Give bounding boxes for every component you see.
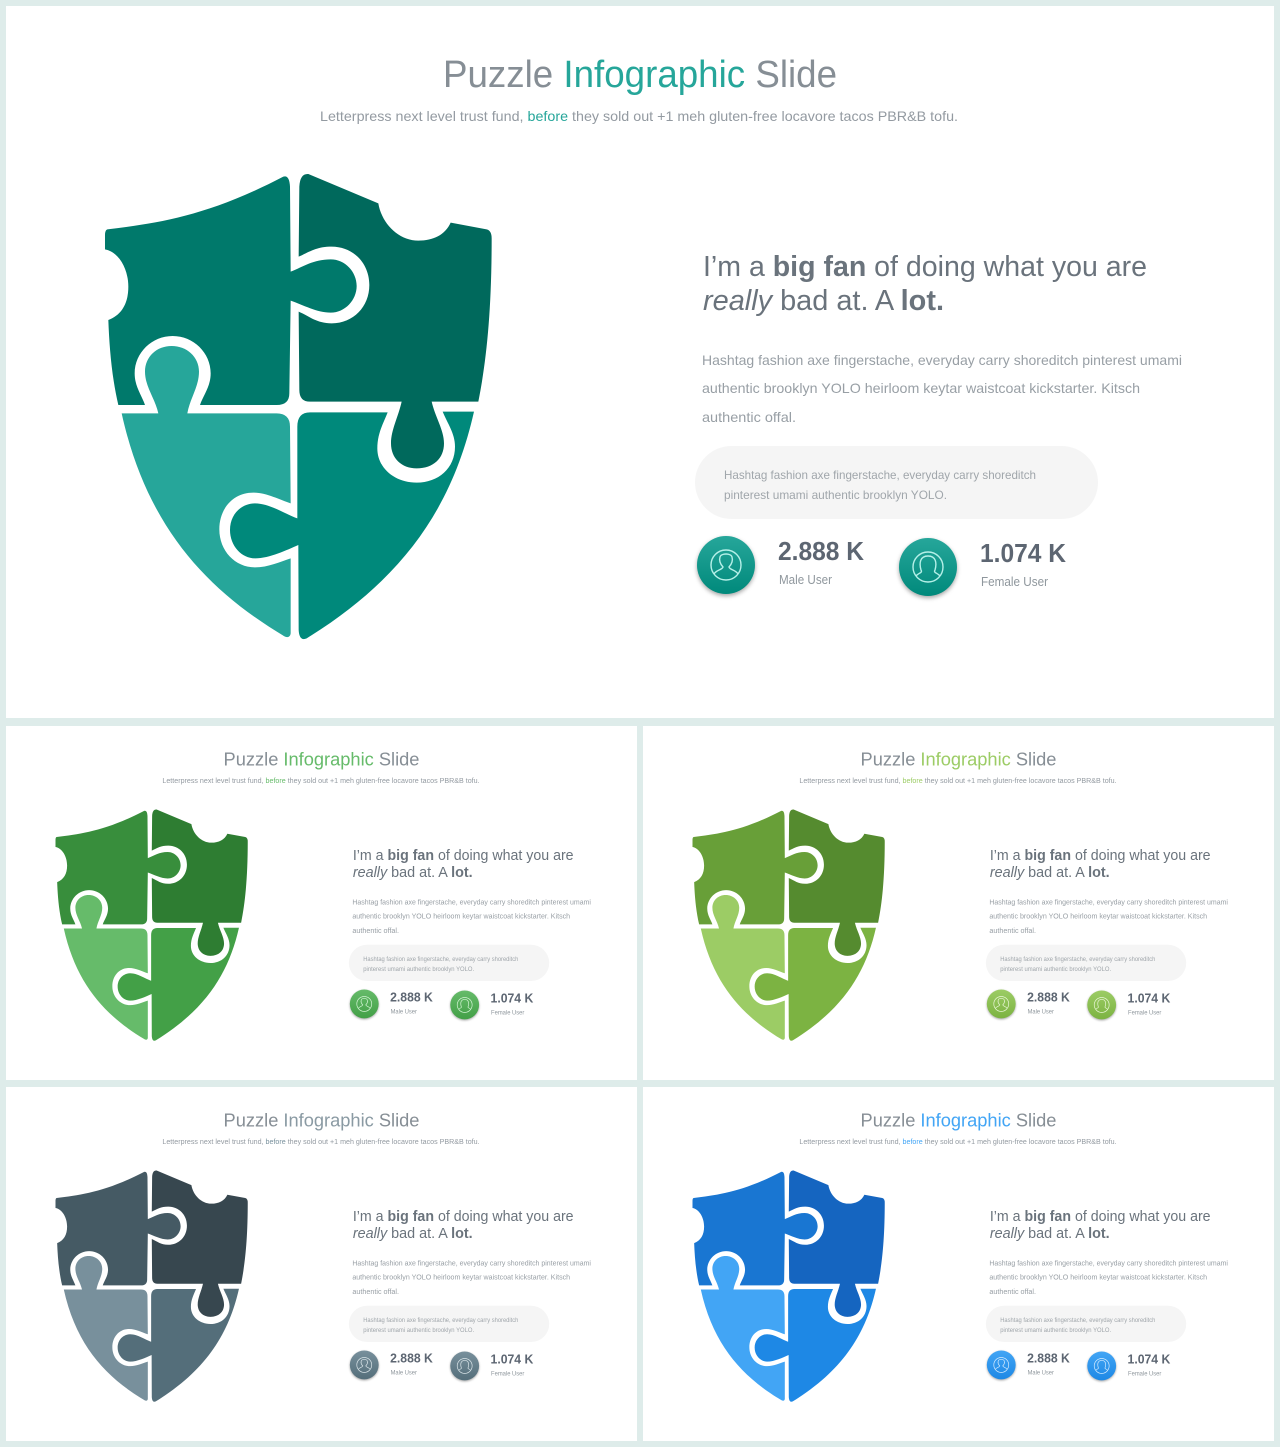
heading: I’m a big fan of doing what you are <box>990 848 1211 864</box>
panel: slate grey slide <box>6 1087 637 1441</box>
body text <box>989 1260 1228 1296</box>
stat: male user <box>350 989 433 1018</box>
subtitle: Letterpress next level trust fund, before they sold out +1 meh gluten-free locavore tacos PBR&B tofu. <box>162 1139 480 1146</box>
stat: female user: Female User <box>981 575 1048 589</box>
body text: authentic offal. <box>702 409 796 425</box>
callout pill <box>349 1306 549 1342</box>
stat: male user: 2.888 K <box>390 1350 433 1365</box>
body text: Hashtag fashion axe fingerstache, everyday carry shoreditch pinterest umami <box>702 352 1182 368</box>
callout pill: Hashtag fashion axe fingerstache, everyday carry shoreditch <box>1000 1318 1155 1324</box>
stat: male user <box>697 536 864 594</box>
callout pill: pinterest umami authentic brooklyn YOLO. <box>1000 1328 1111 1334</box>
puzzle shield <box>56 1171 248 1402</box>
body text <box>989 899 1228 935</box>
callout pill <box>349 945 549 981</box>
stat: female user <box>899 538 1066 596</box>
puzzle shield <box>56 810 248 1041</box>
stat: male user: Male User <box>391 1008 417 1015</box>
stat: female user: 1.074 K <box>1128 990 1171 1005</box>
body text <box>352 1260 591 1296</box>
heading <box>353 848 574 881</box>
heading: really bad at. A lot. <box>353 1226 473 1242</box>
subtitle: Letterpress next level trust fund, before they sold out +1 meh gluten-free locavore tacos PBR&B tofu. <box>799 778 1117 785</box>
heading: really bad at. A lot. <box>990 865 1110 881</box>
panel: green slide <box>6 726 637 1080</box>
heading: I’m a big fan of doing what you are <box>353 848 574 864</box>
stat: male user: 2.888 K <box>390 989 433 1004</box>
body text: authentic offal. <box>989 928 1036 935</box>
subtitle: Letterpress next level trust fund, before they sold out +1 meh gluten-free locavore tacos PBR&B tofu. <box>162 778 480 785</box>
body text: authentic brooklyn YOLO heirloom keytar waistcoat kickstarter. Kitsch <box>352 1274 570 1281</box>
stat: male user: Male User <box>1028 1008 1054 1015</box>
stat: female user: 1.074 K <box>491 1351 534 1366</box>
body text: Hashtag fashion axe fingerstache, everyday carry shoreditch pinterest umami <box>352 1260 591 1267</box>
stat: female user: Female User <box>1128 1009 1161 1016</box>
callout pill: pinterest umami authentic brooklyn YOLO. <box>363 1328 474 1334</box>
body text: authentic brooklyn YOLO heirloom keytar waistcoat kickstarter. Kitsch <box>352 913 570 920</box>
title: Puzzle Infographic Slide <box>443 54 837 96</box>
stat: female user: Female User <box>1128 1370 1161 1377</box>
body text: authentic brooklyn YOLO heirloom keytar waistcoat kickstarter. Kitsch <box>989 913 1207 920</box>
body text: authentic offal. <box>352 928 399 935</box>
heading: really bad at. A lot. <box>703 285 944 317</box>
callout pill: Hashtag fashion axe fingerstache, everyday carry shoreditch <box>1000 957 1155 963</box>
stat: male user: 2.888 K <box>778 536 864 566</box>
heading <box>353 1209 574 1242</box>
callout pill: Hashtag fashion axe fingerstache, everyday carry shoreditch <box>724 468 1036 482</box>
stat: male user <box>987 989 1070 1018</box>
stat: female user: Female User <box>491 1370 524 1377</box>
body text: authentic brooklyn YOLO heirloom keytar waistcoat kickstarter. Kitsch <box>702 380 1140 396</box>
stat: female user <box>450 990 534 1019</box>
body text: Hashtag fashion axe fingerstache, everyday carry shoreditch pinterest umami <box>352 899 591 906</box>
body text: Hashtag fashion axe fingerstache, everyday carry shoreditch pinterest umami <box>989 899 1228 906</box>
title: Puzzle Infographic Slide <box>224 749 419 770</box>
body text <box>352 899 591 935</box>
body text: Hashtag fashion axe fingerstache, everyday carry shoreditch pinterest umami <box>989 1260 1228 1267</box>
stat: female user <box>1087 1351 1171 1380</box>
panel: light green slide <box>643 726 1274 1080</box>
subtitle: Letterpress next level trust fund, before they sold out +1 meh gluten-free locavore tacos PBR&B tofu. <box>799 1139 1117 1146</box>
body text: authentic offal. <box>989 1289 1036 1296</box>
callout pill <box>695 446 1098 519</box>
stat: male user <box>987 1350 1070 1379</box>
stat: female user: 1.074 K <box>491 990 534 1005</box>
stat: female user: 1.074 K <box>980 538 1066 568</box>
body text: authentic offal. <box>352 1289 399 1296</box>
stat: male user: 2.888 K <box>1027 1350 1070 1365</box>
heading: I’m a big fan of doing what you are <box>353 1209 574 1225</box>
callout pill <box>986 945 1186 981</box>
callout pill: pinterest umami authentic brooklyn YOLO. <box>724 488 947 502</box>
callout pill: pinterest umami authentic brooklyn YOLO. <box>1000 967 1111 973</box>
body text <box>702 352 1182 425</box>
subtitle: Letterpress next level trust fund, before they sold out +1 meh gluten-free locavore tacos PBR&B tofu. <box>320 108 958 124</box>
heading <box>990 848 1211 881</box>
heading <box>703 251 1147 317</box>
stat: female user: Female User <box>491 1009 524 1016</box>
callout pill <box>986 1306 1186 1342</box>
heading: I’m a big fan of doing what you are <box>703 251 1147 283</box>
stat: male user <box>350 1350 433 1379</box>
callout pill: pinterest umami authentic brooklyn YOLO. <box>363 967 474 973</box>
stat: male user: Male User <box>391 1369 417 1376</box>
body text: authentic brooklyn YOLO heirloom keytar waistcoat kickstarter. Kitsch <box>989 1274 1207 1281</box>
stat: female user <box>1087 990 1171 1019</box>
stat: male user: Male User <box>1028 1369 1054 1376</box>
stat: male user: Male User <box>779 573 832 587</box>
stat: female user <box>450 1351 534 1380</box>
callout pill: Hashtag fashion axe fingerstache, everyday carry shoreditch <box>363 1318 518 1324</box>
stat: female user: 1.074 K <box>1128 1351 1171 1366</box>
puzzle shield <box>693 1171 885 1402</box>
title: Puzzle Infographic Slide <box>224 1110 419 1131</box>
heading <box>990 1209 1211 1242</box>
title: Puzzle Infographic Slide <box>861 749 1056 770</box>
puzzle shield <box>693 810 885 1041</box>
heading: really bad at. A lot. <box>353 865 473 881</box>
callout pill: Hashtag fashion axe fingerstache, everyday carry shoreditch <box>363 957 518 963</box>
stat: male user: 2.888 K <box>1027 989 1070 1004</box>
puzzle shield <box>105 174 492 639</box>
heading: I’m a big fan of doing what you are <box>990 1209 1211 1225</box>
title: Puzzle Infographic Slide <box>861 1110 1056 1131</box>
panel: blue slide <box>643 1087 1274 1441</box>
heading: really bad at. A lot. <box>990 1226 1110 1242</box>
panel: main teal slide <box>6 6 1274 718</box>
